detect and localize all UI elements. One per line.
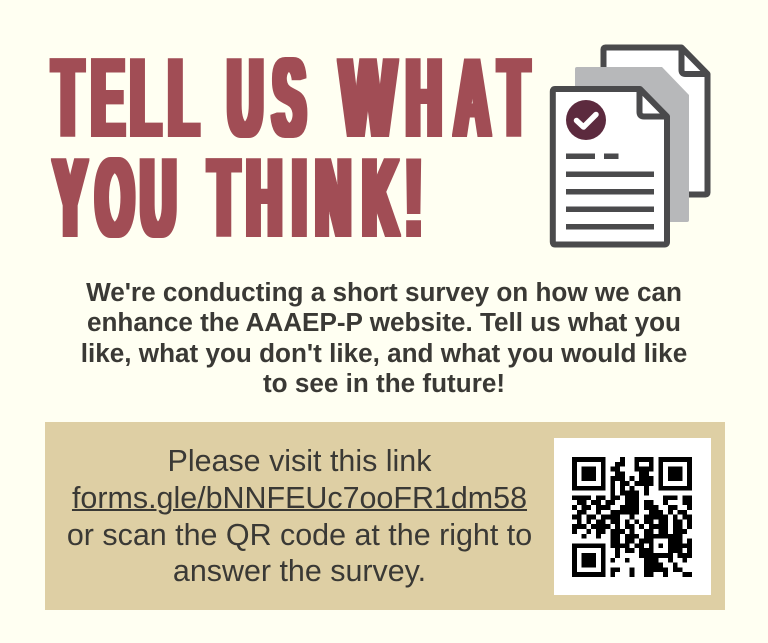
QR code: [554, 438, 711, 595]
survey link instructions: or scan the QR code at the right to: [67, 518, 532, 552]
title: YOU THINK!: [54, 136, 422, 260]
intro paragraph: like, what you don't like, and what you would like: [81, 338, 687, 368]
intro paragraph: enhance the AAAEP-P website. Tell us what you: [87, 307, 681, 337]
title: HAT: [406, 36, 529, 161]
panel: survey link band: [45, 422, 725, 610]
survey link instructions: forms.gle/bNNFEUc7ooFR1dm58: [72, 481, 527, 515]
survey link instructions: answer the survey.: [173, 554, 426, 588]
intro paragraph: [81, 276, 687, 398]
survey link instructions: Please visit this link: [168, 444, 431, 478]
icon: back page: [604, 48, 708, 194]
intro paragraph: to see in the future!: [263, 368, 505, 398]
icon: front page: [553, 89, 667, 244]
icon: middle grey page: [575, 67, 689, 222]
title: TELL US: [53, 36, 305, 161]
icon: stacked survey documents: [550, 44, 710, 248]
icon: check badge: [566, 100, 606, 140]
survey link instructions: [67, 444, 532, 588]
intro paragraph: We're conducting a short survey on how we can: [86, 276, 682, 306]
title: W: [341, 36, 396, 161]
title: [50, 36, 532, 260]
